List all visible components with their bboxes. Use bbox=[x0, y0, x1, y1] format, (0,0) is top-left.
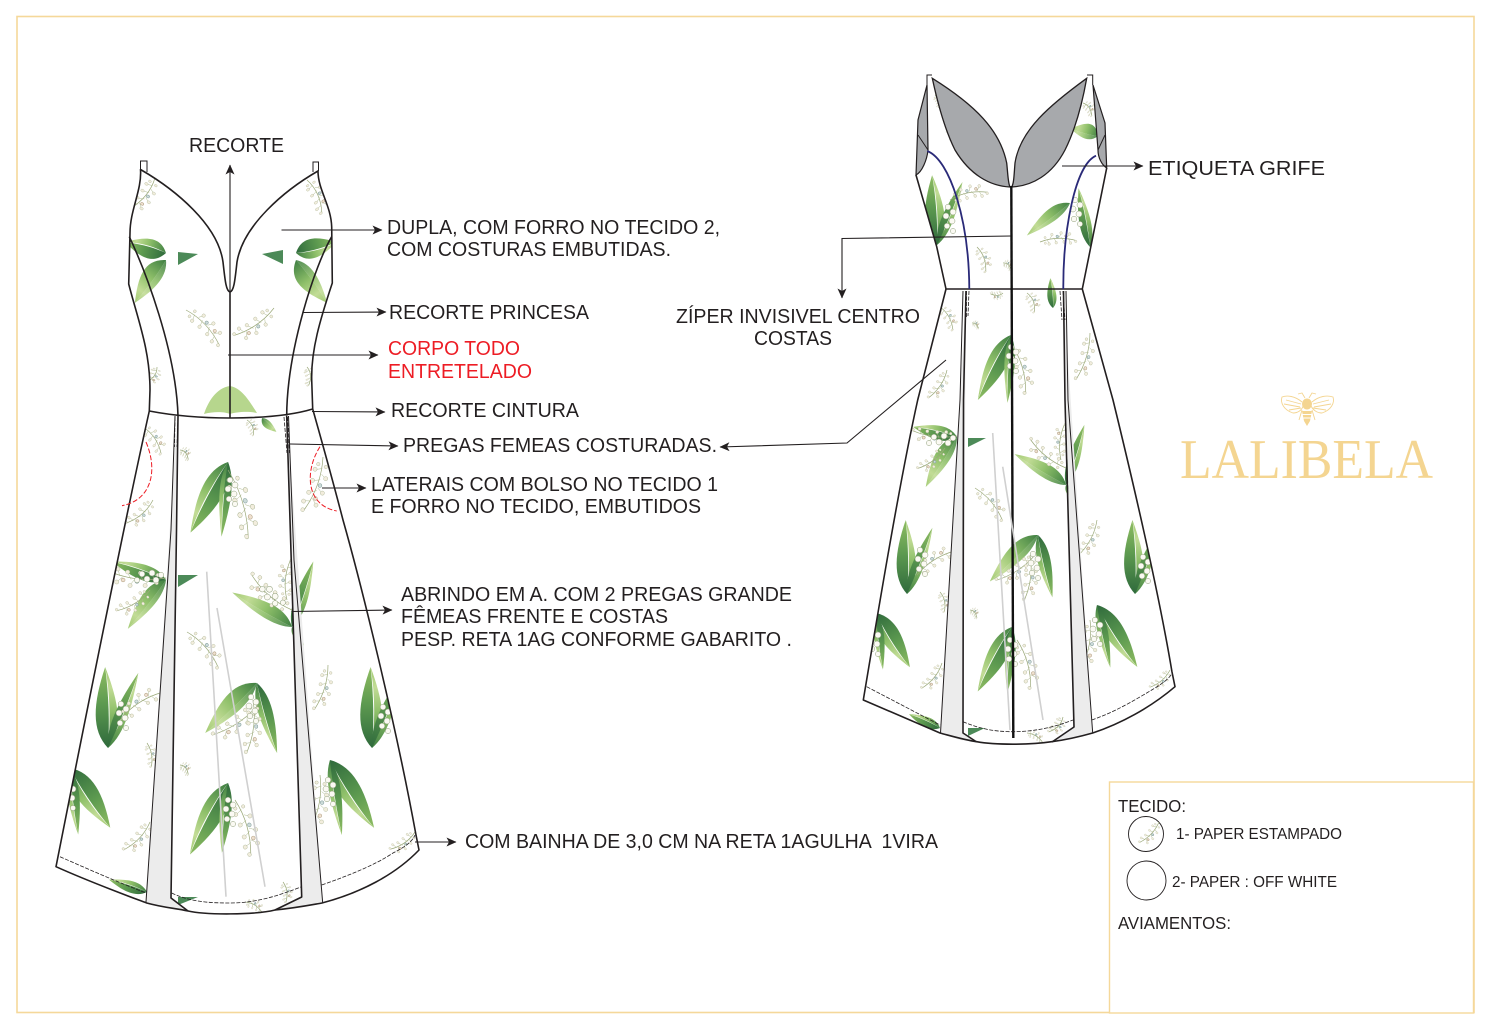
panel: materials legend bbox=[1110, 782, 1474, 1013]
callout: laterais com bolso: LATERAIS COM BOLSO NO TECIDO 1 bbox=[371, 474, 718, 496]
callout: ziper invisivel bbox=[676, 236, 1011, 350]
logo wordmark: LALIBELA bbox=[1180, 429, 1434, 491]
callout: ziper invisivel: COSTAS bbox=[754, 328, 832, 350]
callout: dupla com forro: COM COSTURAS EMBUTIDAS. bbox=[387, 239, 671, 261]
callout: corpo todo entretelado: ENTRETELADO bbox=[388, 361, 532, 383]
icon: bee bbox=[1281, 393, 1334, 426]
front waist and seams bbox=[129, 237, 332, 418]
callout: abrindo em A bbox=[292, 584, 792, 651]
front pleat stitching bbox=[174, 417, 290, 453]
logo bbox=[1180, 393, 1434, 491]
back garment outline bbox=[863, 168, 1175, 744]
back pleat stitching bbox=[966, 291, 1065, 320]
back princess seams bbox=[927, 151, 1096, 289]
callout: ziper invisivel: ZÍPER INVISIVEL CENTRO bbox=[676, 305, 920, 328]
back dress silhouette bbox=[863, 75, 1175, 744]
legend item 1: 1- PAPER ESTAMPADO bbox=[1176, 826, 1342, 843]
back fold lines bbox=[993, 433, 1043, 730]
callout: corpo todo entretelado bbox=[228, 338, 532, 383]
legend item 2: 2- PAPER : OFF WHITE bbox=[1172, 874, 1337, 891]
swatch: off white fabric bbox=[1127, 861, 1166, 900]
front garment outline bbox=[56, 170, 419, 914]
callout: etiqueta grife: ETIQUETA GRIFE bbox=[1148, 158, 1325, 180]
invisible zipper centre back bbox=[1011, 186, 1013, 738]
back neckline lining right bbox=[1012, 78, 1087, 187]
callout: abrindo em A: PESP. RETA 1AG CONFORME GABARITO . bbox=[401, 629, 792, 651]
back dress bbox=[863, 75, 1175, 744]
callout: pregas femeas costuradas bbox=[290, 360, 946, 457]
back pleats bbox=[940, 291, 1093, 742]
back straps bbox=[918, 75, 1105, 150]
front floral print bbox=[61, 173, 420, 915]
callout: recorte princesa: RECORTE PRINCESA bbox=[389, 302, 590, 324]
back pleat lines bbox=[963, 291, 1074, 742]
callout: dupla com forro: DUPLA, COM FORRO NO TECIDO 2, bbox=[387, 217, 720, 239]
callout: bainha: COM BAINHA DE 3,0 CM NA RETA 1AGULHA 1VIRA bbox=[465, 831, 939, 853]
back hem stitching bbox=[867, 674, 1172, 732]
swatch: printed fabric bbox=[1128, 816, 1164, 852]
callout: laterais com bolso bbox=[322, 474, 718, 518]
back neckline lining left bbox=[932, 78, 1010, 187]
legend heading: tecido: TECIDO: bbox=[1118, 796, 1186, 816]
callout: abrindo em A: FÊMEAS FRENTE E COSTAS bbox=[401, 605, 668, 628]
callout: laterais com bolso: E FORRO NO TECIDO, EMBUTIDOS bbox=[371, 496, 701, 518]
front dress bbox=[56, 161, 420, 915]
front pleat lines bbox=[171, 416, 302, 911]
pocket markings bbox=[122, 442, 337, 511]
back side lining bbox=[916, 85, 1107, 175]
callout: recorte cintura: RECORTE CINTURA bbox=[391, 400, 580, 422]
front pleats bbox=[146, 416, 323, 911]
legend heading: aviamentos: AVIAMENTOS: bbox=[1118, 913, 1231, 933]
callout: recorte: RECORTE bbox=[189, 135, 284, 157]
front straps bbox=[140, 161, 318, 172]
front fold lines bbox=[207, 572, 265, 897]
front hem stitching bbox=[60, 835, 415, 903]
callout: dupla com forro bbox=[282, 217, 720, 261]
callout: pregas femeas costuradas: PREGAS FEMEAS COSTURADAS. bbox=[403, 435, 717, 457]
front dress silhouette bbox=[56, 170, 419, 914]
back floral print bbox=[868, 91, 1174, 744]
callout: abrindo em A: ABRINDO EM A. COM 2 PREGAS GRANDE bbox=[401, 584, 792, 606]
callout: corpo todo entretelado: CORPO TODO bbox=[388, 338, 520, 360]
